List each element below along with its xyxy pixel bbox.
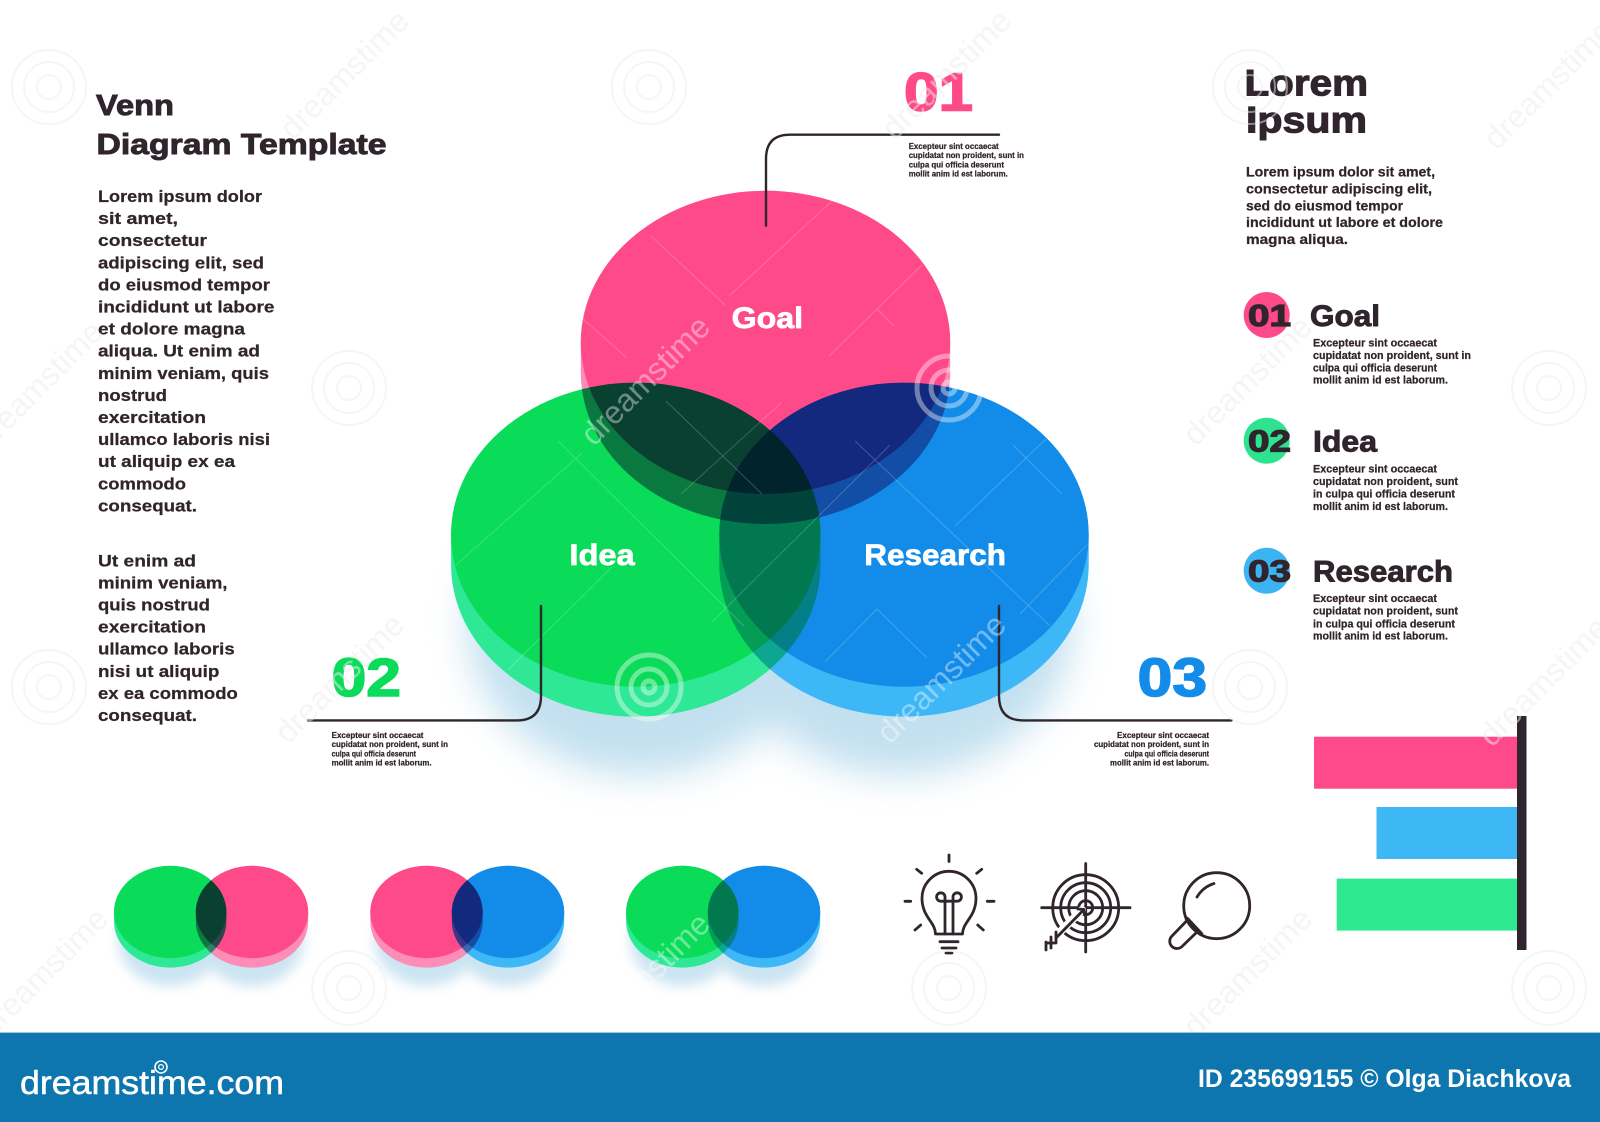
list item: Research: Excepteur sint occaecat <box>1313 593 1437 605</box>
callout: 03: Excepteur sint occaecat <box>1117 730 1209 740</box>
watermark text over discs: dreamstime <box>869 606 1013 750</box>
list item: Idea <box>1244 418 1458 513</box>
watermark text: dreamstime <box>1175 308 1319 452</box>
label: Goal: Goal <box>732 302 803 335</box>
watermark text: dreamstime <box>874 2 1018 146</box>
text block: left first paragraph: et dolore magna <box>98 320 246 339</box>
text block: right intro <box>1246 165 1444 247</box>
watermark text: dreamstime <box>267 606 411 750</box>
small venn: idea and goal <box>114 866 308 968</box>
heading: Lorem Ipsum: Ipsum <box>1246 100 1367 140</box>
callout: 02: cupidatat non proident, sunt in <box>332 739 448 749</box>
text block: right intro: incididunt ut labore et dolore <box>1246 215 1444 230</box>
text block: left second paragraph: quis nostrud <box>98 596 210 614</box>
text block: right intro: sed do eiusmod tempor <box>1246 198 1404 213</box>
list item: Idea: cupidatat non proident, sunt <box>1313 476 1458 488</box>
circle: research <box>719 383 1089 717</box>
text block: left second paragraph: Ut enim ad <box>98 551 196 570</box>
icon: target with arrow <box>1042 864 1130 952</box>
list item: Goal <box>1244 292 1471 387</box>
icon: magnifying glass <box>1170 873 1250 949</box>
list item: Research <box>1244 548 1458 642</box>
list item: Research: cupidatat non proident, sunt <box>1313 606 1458 618</box>
text block: left first paragraph: exercitation <box>98 408 206 427</box>
watermark text: dreamstime <box>1175 900 1319 1044</box>
footer bar <box>0 1033 1600 1122</box>
text block: left second paragraph: nisi ut aliquip <box>98 662 219 681</box>
label: Idea: Idea <box>569 539 635 572</box>
list item: Idea: Excepteur sint occaecat <box>1313 464 1437 476</box>
list item: Goal: cupidatat non proident, sunt in <box>1313 350 1471 362</box>
callout: 01: 01 <box>904 62 973 122</box>
text block: left second paragraph: minim veniam, <box>98 573 228 592</box>
text block: left first paragraph: Lorem ipsum dolor <box>98 187 262 206</box>
text block: left first paragraph: commodo <box>98 474 186 493</box>
venn diagram <box>451 191 1089 717</box>
text block: left second paragraph: ex ea commodo <box>98 684 238 703</box>
list item: Idea: 02 <box>1248 424 1291 459</box>
list item: Goal: Excepteur sint occaecat <box>1313 338 1437 350</box>
text block: left first paragraph: ut aliquip ex ea <box>98 452 236 471</box>
shadow: main venn <box>448 588 1092 794</box>
title <box>96 90 386 161</box>
text block: left first paragraph: incididunt ut labore <box>98 298 274 316</box>
text block: left first paragraph: aliqua. Ut enim ad <box>98 342 260 361</box>
callout: 01: cupidatat non proident, sunt in <box>909 150 1024 160</box>
list item: Research: in culpa qui officia deserunt <box>1313 618 1455 630</box>
callout: 02 <box>308 606 541 768</box>
text block: left first paragraph: sit amet, <box>98 209 178 228</box>
text block: left first paragraph: minim veniam, quis <box>98 364 269 383</box>
list item: Idea: Idea <box>1313 426 1377 459</box>
callout: 03 <box>999 606 1232 768</box>
callout: 02: mollit anim id est laborum. <box>332 758 432 768</box>
callout: 02: 02 <box>332 648 401 708</box>
list item: Goal: Goal <box>1310 300 1380 333</box>
small venn: goal and research <box>370 866 564 968</box>
callout: 02: culpa qui officia deserunt <box>332 748 416 758</box>
small venn: idea and research <box>626 866 820 968</box>
callout: 03: 03 <box>1138 648 1207 708</box>
list item: Idea: mollit anim id est laborum. <box>1313 501 1448 513</box>
callout: 03: mollit anim id est laborum. <box>1110 758 1209 768</box>
text block: left second paragraph: consequat. <box>98 706 197 725</box>
footer logo: dreamstime.com <box>20 1064 284 1101</box>
text block: right intro: magna aliqua. <box>1246 232 1348 247</box>
bar chart <box>1314 716 1526 950</box>
text block: left first paragraph: ullamco laboris nisi <box>98 430 270 449</box>
callout: 01: Excepteur sint occaecat <box>909 141 999 151</box>
text block: left first paragraph: do eiusmod tempor <box>98 275 270 294</box>
callout: 01: culpa qui officia deserunt <box>909 159 1004 169</box>
text block: left second paragraph: ullamco laboris <box>98 640 235 659</box>
callout: 03: culpa qui officia deserunt <box>1124 748 1209 758</box>
text block: right intro: Lorem ipsum dolor sit amet, <box>1246 165 1435 180</box>
label: Research: Research <box>864 539 1006 572</box>
list item: Research: Research <box>1313 556 1453 589</box>
footer credit: ID 235699155 © Olga Diachkova <box>1198 1065 1572 1093</box>
watermark text over discs <box>573 308 1013 1049</box>
list item: Goal: culpa qui officia deserunt <box>1313 362 1437 374</box>
text block: left second paragraph: exercitation <box>98 618 206 637</box>
text block: left first paragraph <box>98 187 274 515</box>
text block: left first paragraph: consequat. <box>98 496 197 515</box>
watermark spirals over discs <box>617 356 981 719</box>
text block: left second paragraph <box>98 551 238 725</box>
circle: idea <box>451 383 820 717</box>
heading: Lorem Ipsum: Lorem <box>1244 62 1368 104</box>
callout: 02: Excepteur sint occaecat <box>332 730 424 740</box>
list item: Research: 03 <box>1248 554 1291 589</box>
list item: Idea: in culpa qui officia deserunt <box>1313 488 1455 500</box>
text block: left first paragraph: adipiscing elit, sed <box>98 253 264 272</box>
watermark text over discs: dreamstime <box>573 308 717 452</box>
callout: 01: mollit anim id est laborum. <box>909 169 1008 179</box>
callout: 03: cupidatat non proident, sunt in <box>1094 739 1209 749</box>
circle: goal <box>581 191 950 524</box>
callout: 01 <box>766 62 1024 226</box>
text block: left first paragraph: consectetur <box>98 231 207 250</box>
list item: Goal: 01 <box>1248 298 1291 333</box>
shadow: small venns <box>113 928 822 992</box>
list item: Goal: mollit anim id est laborum. <box>1313 375 1448 387</box>
text block: left first paragraph: nostrud <box>98 386 167 405</box>
title: Venn <box>96 90 174 122</box>
text block: right intro: consectetur adipiscing elit, <box>1246 182 1432 196</box>
heading: Lorem Ipsum <box>1244 62 1368 140</box>
icon: light bulb <box>905 855 994 953</box>
title: Diagram Template <box>96 129 386 161</box>
watermark text over discs: dreamstime <box>573 905 717 1049</box>
watermark text: dreamstime <box>272 2 416 146</box>
list item: Research: mollit anim id est laborum. <box>1313 630 1448 642</box>
